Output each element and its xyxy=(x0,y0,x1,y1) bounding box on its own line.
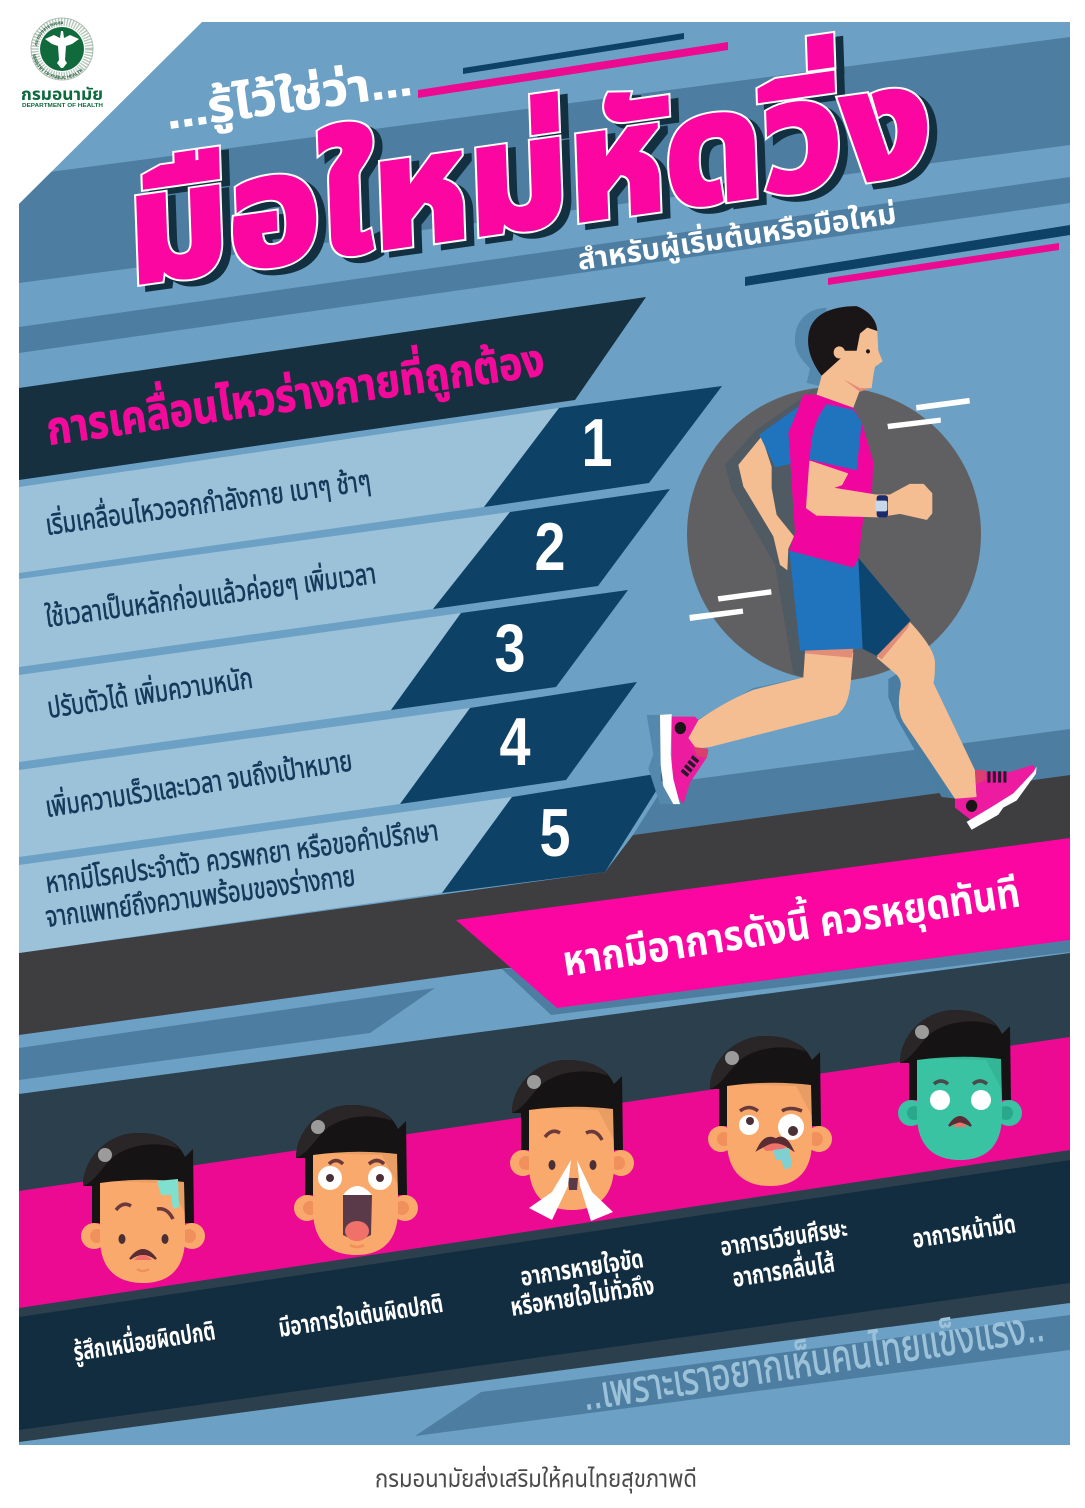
caption: หรือหายใจไม่ทั่วถึง: หรือหายใจไม่ทั่วถึง xyxy=(508,1268,656,1322)
row 2: ใช้เวลาเป็นหลักก่อนแล้วค่อยๆ เพิ่มเวลา xyxy=(43,555,378,634)
watch xyxy=(875,495,888,517)
row 4: 4 xyxy=(500,704,531,780)
footer text: กรมอนามัยส่งเสริมให้คนไทยสุขภาพดี xyxy=(375,1465,697,1494)
logo: department of health: กระทรวงสาธารณสุข xyxy=(34,21,63,46)
main title: มือใหม่หัดวิ่ง xyxy=(125,23,933,315)
caption: มีอาการใจเต้นผิดปกติ: มีอาการใจเต้นผิดปกติ xyxy=(276,1288,445,1343)
row 3: 3 xyxy=(494,610,526,686)
caption: อาการหน้ามืด: อาการหน้ามืด xyxy=(910,1208,1018,1254)
front sleeve xyxy=(809,404,862,470)
torso shirt xyxy=(788,395,873,568)
row 3 xyxy=(19,590,628,762)
navy caption band xyxy=(19,1160,1070,1430)
back arm xyxy=(738,436,794,570)
hair xyxy=(808,306,877,376)
stop banner xyxy=(456,838,1070,1015)
subtitle: สำหรับผู้เริ่มต้นหรือมือใหม่ xyxy=(575,194,899,278)
panel: correct movement list xyxy=(19,297,722,953)
lower blue stripe xyxy=(19,988,435,1080)
kicker: รู้ไว้ใช่ว่า: ...รู้ไว้ใช่ว่า... xyxy=(162,53,415,141)
logo: department of health: กรมอนามัย xyxy=(21,85,103,104)
decorative subtitle lines xyxy=(745,225,1070,286)
row 5: จากแพทย์ถึงความพร้อมของร่างกาย xyxy=(44,860,357,934)
title band 2 xyxy=(19,177,1070,353)
decorative title lines top xyxy=(418,33,728,98)
symptom 4: dizziness and nausea xyxy=(708,1036,832,1186)
back shoe xyxy=(660,714,708,804)
symptom 1: unusual fatigue xyxy=(81,1133,205,1283)
row 2: 2 xyxy=(534,509,566,585)
shorts xyxy=(789,551,863,651)
illustration: runner xyxy=(647,306,1037,830)
logo: department of health: DEPARTMENT OF HEALTH xyxy=(22,103,103,109)
head and neck xyxy=(817,327,883,408)
back sleeve xyxy=(759,406,799,467)
symptom 5: faintness xyxy=(898,1010,1022,1160)
logo: department of health xyxy=(21,18,103,109)
pink symptom band xyxy=(19,1037,1070,1308)
front leg xyxy=(877,622,977,799)
caption: อาการคลื่นไส้: อาการคลื่นไส้ xyxy=(730,1245,837,1293)
front shoe xyxy=(955,765,1037,830)
caption: อาการหายใจขัด: อาการหายใจขัด xyxy=(518,1243,645,1292)
main title: มือใหม่หัดวิ่ง xyxy=(125,23,933,315)
ground band behind runner xyxy=(633,729,1070,835)
row 4: เพิ่มความเร็วและเวลา จนถึงเป้าหมาย xyxy=(43,742,354,824)
caption: รู้สึกเหนื่อยผิดปกติ: รู้สึกเหนื่อยผิดปกติ xyxy=(71,1312,217,1368)
row 5 xyxy=(19,772,668,953)
row 4 xyxy=(19,682,637,857)
dark grey road band xyxy=(19,775,1070,1035)
row 1 xyxy=(19,386,722,573)
row 5: 5 xyxy=(540,795,570,871)
symptom 2: abnormal heartbeat xyxy=(294,1105,418,1255)
row 1: เริ่มเคลื่อนไหวออกกำลังกาย เบาๆ ช้าๆ xyxy=(43,460,373,542)
front arm and fist xyxy=(807,461,932,519)
row 3: ปรับตัวได้ เพิ่มความหนัก xyxy=(45,659,255,725)
row 5: หากมีโรคประจำตัว ควรพกยา หรือขอคำปรึกษา xyxy=(44,815,440,900)
row 2 xyxy=(19,489,670,667)
title band 1 xyxy=(19,37,1070,283)
illustration: grey circle behind runner xyxy=(687,387,981,681)
caption: อาการเวียนศีรษะ: อาการเวียนศีรษะ xyxy=(718,1213,849,1262)
stop banner text: หากมีอาการดังนี้ ควรหยุดทันที xyxy=(558,862,1023,987)
speed lines xyxy=(689,398,970,621)
heading banner xyxy=(19,297,646,480)
runner shadow xyxy=(647,308,957,804)
bottom accent band xyxy=(415,1315,1070,1436)
back leg xyxy=(688,652,853,749)
row 1: 1 xyxy=(582,405,612,481)
symptom 3: shortness of breath xyxy=(510,1060,634,1221)
logo: department of health: MINISTRY OF PUBLIC HEALTH xyxy=(32,54,83,79)
heading text: การเคลื่อนไหวร่างกายที่ถูกต้อง xyxy=(42,327,548,457)
slate band xyxy=(19,953,1070,1442)
